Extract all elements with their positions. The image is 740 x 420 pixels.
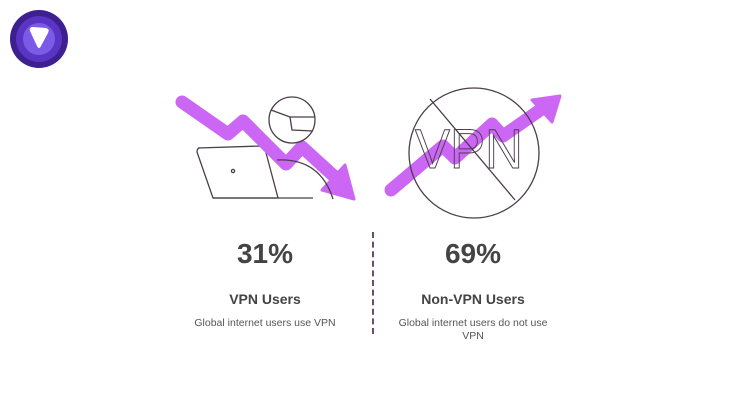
stat: VPN users xyxy=(194,238,336,329)
text: VPN letters: VPN xyxy=(415,117,523,180)
icon: laptop xyxy=(197,146,313,198)
logo xyxy=(10,10,68,68)
arrow: downward trend xyxy=(182,102,354,199)
arrow: upward trend xyxy=(391,96,560,190)
illustration: VPN users xyxy=(176,96,356,200)
number: 31%: 31% xyxy=(237,238,293,269)
heading: VPN Users: VPN Users xyxy=(229,291,301,307)
icon: VPN crossed circle xyxy=(409,88,539,218)
stat: Non-VPN users xyxy=(399,238,547,342)
icon: person xyxy=(269,97,333,199)
illustration: non-VPN users xyxy=(384,87,562,219)
text: description: Global internet users do not use VPN xyxy=(399,317,547,342)
divider xyxy=(372,232,374,334)
text: description: Global internet users use VPN xyxy=(194,317,336,329)
number: 69%: 69% xyxy=(445,238,501,269)
heading: Non-VPN Users: Non-VPN Users xyxy=(421,291,525,307)
